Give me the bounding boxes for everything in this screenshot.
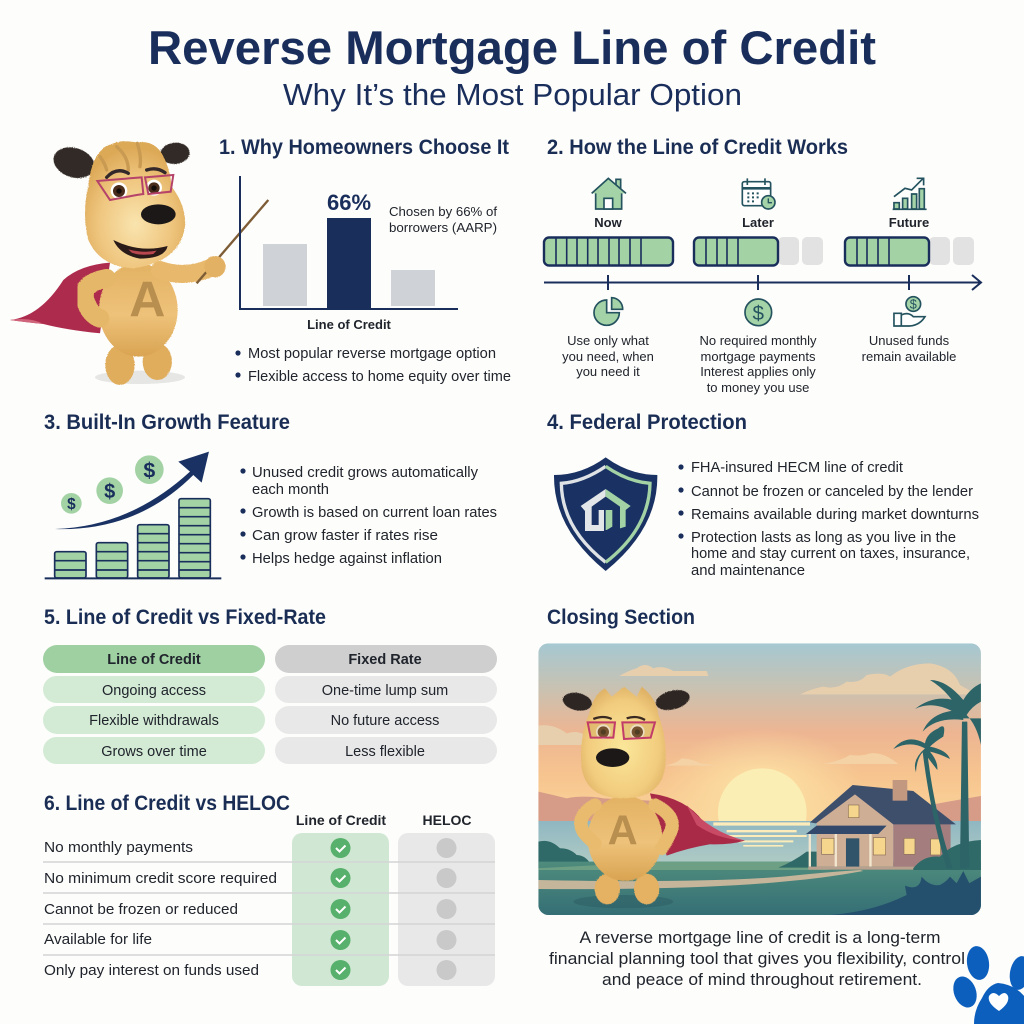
HELOC comparison table: No minimum credit score required [44,871,277,887]
timeline benefit icons: $ [910,298,917,312]
timeline icons [592,178,927,209]
timeline caption: now: you need, when [562,349,654,364]
timeline benefit icons [594,297,925,326]
timeline labels [594,215,929,230]
timeline caption: later: to money you use [707,380,809,395]
comparison: fixed rate column: Less flexible [345,744,425,760]
comparison: line of credit column: Grows over time [101,744,207,760]
HELOC comparison table: HELOC [422,812,472,828]
heading closing: Closing Section [547,606,695,629]
timeline caption: later: No required monthly [699,333,817,348]
subtitle: Why It’s the Most Popular Option [283,77,742,112]
heading 5: 5. Line of Credit vs Fixed-Rate [44,606,326,629]
section 1 bullets [235,346,511,385]
section 3 bullets: Unused credit grows automatically [252,465,479,481]
section 3 bullets: each month [252,482,329,498]
timeline caption: later: mortgage payments [701,349,816,364]
comparison: line of credit column: Ongoing access [102,683,206,699]
section 4 bullets: FHA-insured HECM line of credit [691,460,903,476]
credit bars [544,237,974,266]
timeline benefit icons: $ [753,302,765,325]
HELOC comparison table: Line of Credit [296,812,386,828]
HELOC comparison table: Available for life [44,932,152,948]
icon: growth stacks and arrow: $ [143,458,155,482]
section 4 bullets: home and stay current on taxes, insurance, [691,546,970,562]
closing statement line 2: financial planning tool that gives you flexibility, control [549,949,965,968]
section 1 bullets: Flexible access to home equity over time [248,369,511,385]
closing illustration: mascot at sunset with house: A [608,806,638,853]
comparison: fixed rate column [275,645,497,764]
section 4 bullets [678,460,979,579]
section 3 bullets: Can grow faster if rates rise [252,528,438,544]
bar chart: chosen option [240,176,458,332]
section 1 bullets: Most popular reverse mortgage option [248,346,496,362]
title: Reverse Mortgage Line of Credit [148,21,876,74]
bar chart: chosen option: 66% [327,190,371,215]
icon: growth stacks and arrow [45,452,221,578]
section 4 bullets: and maintenance [691,563,805,579]
comparison: fixed rate column: Fixed Rate [348,652,422,668]
heading 6: 6. Line of Credit vs HELOC [44,792,290,815]
timeline arrow [544,275,981,290]
section 4 bullets: Protection lasts as long as you live in the [691,530,956,546]
mascot: dog with pointer [10,141,268,385]
mascot: dog with pointer: A [129,272,165,328]
heading 3: 3. Built-In Growth Feature [44,411,290,434]
timeline caption: future: remain available [862,349,956,364]
timeline caption: now: Use only what [567,333,649,348]
comparison: fixed rate column: One-time lump sum [322,683,448,699]
icon: shield with house [554,457,657,571]
chart callout [389,204,497,235]
comparison: line of credit column [43,645,265,764]
icon: growth stacks and arrow: $ [67,496,76,513]
heading 1: 1. Why Homeowners Choose It [219,136,509,159]
HELOC comparison table: Only pay interest on funds used [44,963,259,979]
timeline caption: now: you need it [576,364,640,379]
icon: blue paw logo [949,945,1024,1024]
HELOC comparison table [43,812,495,986]
icon: growth stacks and arrow: $ [104,481,115,503]
closing illustration: mascot at sunset with house [538,643,981,915]
heading 4: 4. Federal Protection [547,411,747,434]
timeline labels: Now [594,215,623,230]
timeline labels: Future [889,215,929,230]
comparison: fixed rate column: No future access [331,713,439,729]
bar chart: chosen option: Line of Credit [307,317,392,332]
section 3 bullets [240,465,497,567]
HELOC comparison table: Cannot be frozen or reduced [44,902,238,918]
comparison: line of credit column: Flexible withdrawals [89,713,219,729]
timeline labels: Later [742,215,774,230]
closing statement: A reverse mortgage line of credit is a long-term [580,928,940,947]
section 4 bullets: Cannot be frozen or canceled by the lender [691,484,973,500]
chart callout: Chosen by 66% of [389,204,497,219]
chart callout: borrowers (AARP) [389,220,497,235]
timeline caption: later: Interest applies only [700,364,816,379]
comparison: line of credit column: Line of Credit [107,652,201,668]
HELOC comparison table: No monthly payments [44,840,193,856]
timeline caption: future: Unused funds [869,333,949,348]
section 3 bullets: Helps hedge against inflation [252,551,442,567]
closing statement line 3: and peace of mind throughout retirement. [602,970,922,989]
heading 2: 2. How the Line of Credit Works [547,136,848,159]
section 3 bullets: Growth is based on current loan rates [252,505,497,521]
section 4 bullets: Remains available during market downturns [691,507,979,523]
